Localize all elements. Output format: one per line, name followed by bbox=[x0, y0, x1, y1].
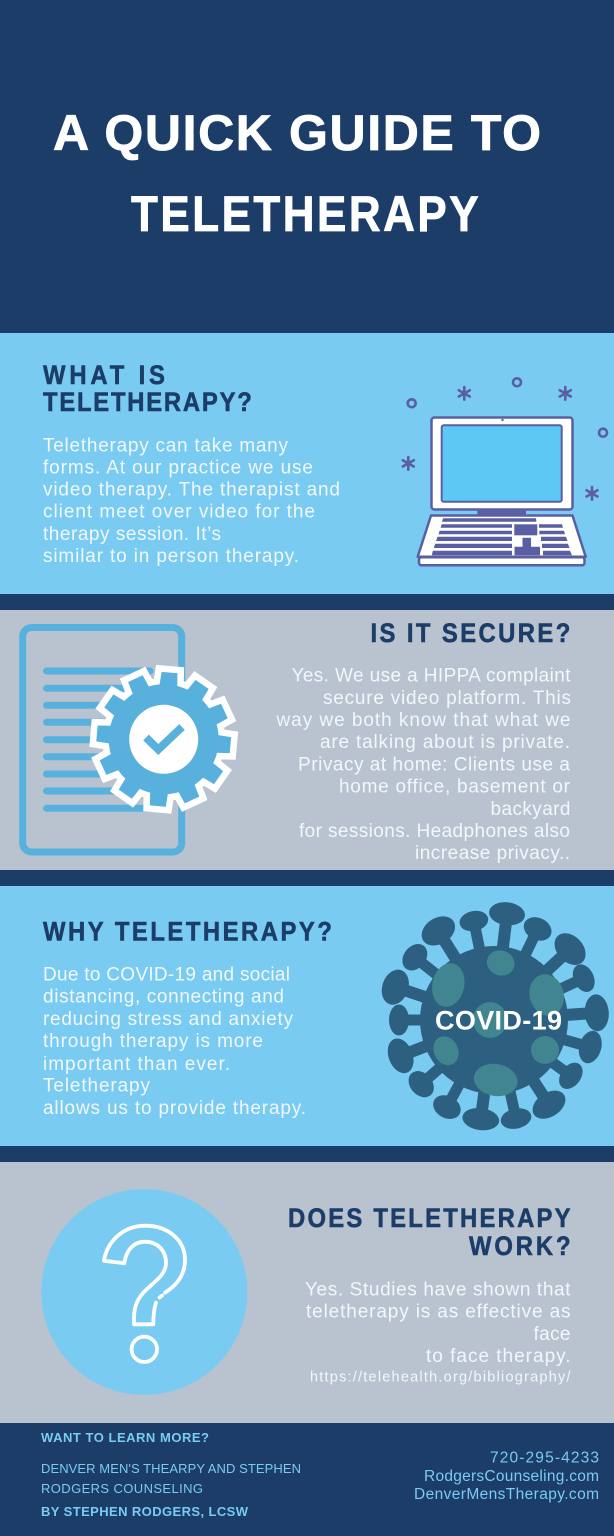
footer: learn more bbox=[41, 1430, 301, 1519]
panel: why teletherapy bbox=[0, 886, 614, 1146]
text block: is it secure: increase privacy.. bbox=[415, 843, 570, 864]
icon: coronavirus bbox=[377, 900, 610, 1132]
virus patches bbox=[428, 946, 569, 1100]
virus spikes bbox=[377, 900, 610, 1132]
text block: why teletherapy: reducing stress and anxiety bbox=[43, 1009, 294, 1030]
text block: why teletherapy: allows us to provide therapy. bbox=[43, 1098, 306, 1119]
footer: contact details: DenverMensTherapy.com bbox=[414, 1486, 599, 1503]
title bbox=[53, 105, 541, 242]
virus label: COVID-19 bbox=[435, 1006, 562, 1036]
text block: why teletherapy bbox=[43, 965, 306, 1119]
text block: what is teletherapy: video therapy. The therapist and bbox=[43, 480, 340, 501]
panel: what is teletherapy bbox=[0, 333, 614, 594]
footer: contact details bbox=[414, 1450, 599, 1503]
footer: contact details: RodgersCounseling.com bbox=[424, 1468, 599, 1485]
heading: what is teletherapy: WHAT IS bbox=[43, 361, 165, 390]
footer: learn more: WANT TO LEARN MORE? bbox=[41, 1430, 209, 1445]
footer bbox=[41, 1430, 599, 1519]
virus body bbox=[420, 946, 568, 1094]
icon: question mark in circle bbox=[41, 1189, 247, 1395]
question mark bbox=[104, 1226, 185, 1362]
text block: why teletherapy: Teletherapy bbox=[43, 1076, 150, 1097]
text block: is it secure: Privacy at home: Clients use a bbox=[298, 755, 570, 776]
heading: what is teletherapy bbox=[43, 361, 252, 417]
footer: learn more: RODGERS COUNSELING bbox=[41, 1481, 203, 1496]
text block: why teletherapy: through therapy is more bbox=[43, 1031, 263, 1052]
heading: is it secure: IS IT SECURE? bbox=[370, 619, 570, 648]
text block: what is teletherapy: client meet over video for the bbox=[43, 502, 315, 523]
text block: what is teletherapy: therapy session. It’s bbox=[43, 524, 221, 545]
text block: does teletherapy work: https://telehealth.org/bibliography/ bbox=[310, 1370, 571, 1386]
heading: does teletherapy work: DOES TELETHERAPY bbox=[288, 1204, 571, 1233]
text block: what is teletherapy: Teletherapy can take many bbox=[43, 436, 288, 457]
text block: does teletherapy work bbox=[305, 1280, 571, 1386]
check badge bbox=[129, 705, 198, 774]
text block: does teletherapy work: to face therapy. bbox=[426, 1346, 570, 1367]
icon: laptop bbox=[403, 378, 607, 565]
text block: what is teletherapy bbox=[43, 436, 340, 567]
text block: is it secure: Yes. We use a HIPPA complaint bbox=[292, 666, 571, 687]
footer: learn more: DENVER MEN'S THEARPY AND STEPHEN bbox=[41, 1461, 301, 1476]
title: TELETHERAPY bbox=[131, 185, 479, 242]
text block: is it secure: backyard bbox=[490, 799, 570, 820]
text block: why teletherapy: Due to COVID-19 and social bbox=[43, 965, 290, 986]
document bbox=[23, 628, 182, 852]
title: A QUICK GUIDE TO bbox=[53, 105, 541, 161]
text block: is it secure: way we both know that what we bbox=[276, 710, 570, 731]
heading: does teletherapy work: WORK? bbox=[469, 1232, 571, 1261]
text block: is it secure: are talking about is private. bbox=[320, 732, 570, 753]
panel: is it secure bbox=[0, 610, 614, 870]
icon: document with gear checkmark bbox=[23, 628, 236, 852]
text block: does teletherapy work: face bbox=[534, 1324, 570, 1345]
laptop sparkles bbox=[403, 378, 607, 500]
panel: does teletherapy work bbox=[0, 1162, 614, 1423]
footer: contact details: 720-295-4233 bbox=[490, 1450, 599, 1466]
heading: why teletherapy: WHY TELETHERAPY? bbox=[43, 918, 332, 947]
heading: what is teletherapy: TELETHERAPY? bbox=[43, 388, 252, 417]
text block: does teletherapy work: teletherapy is as effective as bbox=[306, 1302, 570, 1323]
text block: why teletherapy: distancing, connecting and bbox=[43, 987, 284, 1008]
laptop screen bbox=[432, 418, 572, 510]
text block: what is teletherapy: forms. At our practice we use bbox=[43, 458, 313, 478]
text block: why teletherapy: important than ever. bbox=[43, 1054, 230, 1075]
gear bbox=[91, 667, 236, 812]
text block: is it secure: home office, basement or bbox=[339, 777, 571, 798]
laptop keyboard bbox=[418, 516, 586, 565]
text block: what is teletherapy: similar to in person therapy. bbox=[43, 546, 299, 567]
text block: is it secure bbox=[276, 666, 571, 864]
heading: does teletherapy work bbox=[288, 1204, 571, 1261]
text block: does teletherapy work: Yes. Studies have shown that bbox=[305, 1280, 571, 1301]
footer: learn more: BY STEPHEN RODGERS, LCSW bbox=[41, 1504, 249, 1519]
text block: is it secure: secure video platform. This bbox=[323, 688, 571, 709]
text block: is it secure: for sessions. Headphones also bbox=[299, 821, 570, 842]
